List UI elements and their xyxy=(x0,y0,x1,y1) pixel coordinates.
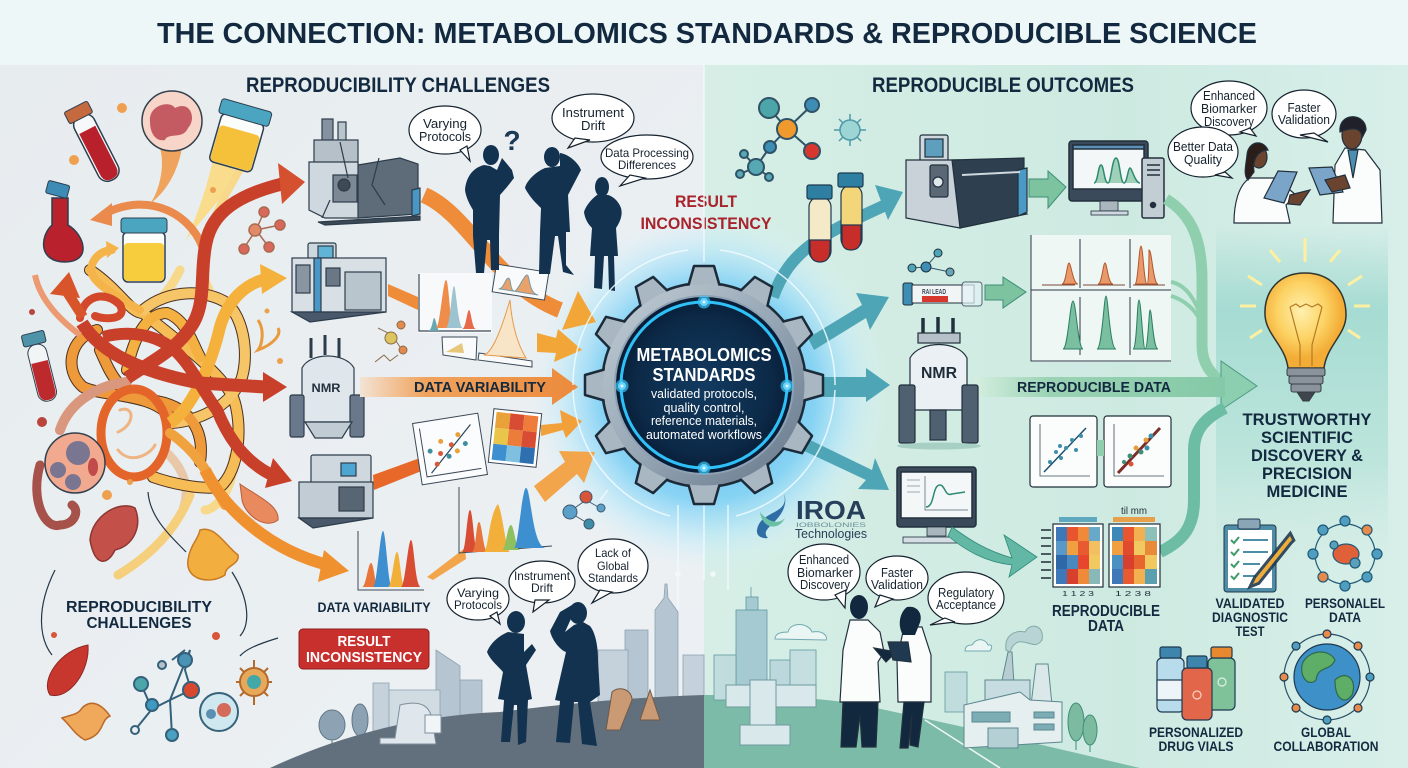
chart: multi peak xyxy=(459,487,552,553)
icon: scanner left xyxy=(380,703,441,744)
orange lower strand xyxy=(170,433,225,505)
label: reproducible data: DATA xyxy=(1088,618,1124,635)
icon: blood flask xyxy=(44,180,83,262)
gear text xyxy=(636,345,772,442)
arrow: tangle to NMR xyxy=(82,323,287,402)
icon: factory xyxy=(964,652,1062,748)
chart: stacked peaks panel xyxy=(1031,235,1171,362)
arrow: chart to gear lower xyxy=(534,451,595,502)
callout bubbles: bottom outcomes: Faster xyxy=(881,566,913,580)
label: reproducibility challenges: REPRODUCIBILITY xyxy=(66,599,212,616)
label: personalel data: PERSONALEL xyxy=(1305,595,1385,611)
silhouettes: researchers bottom xyxy=(487,602,600,746)
label: data variability: DATA VARIABILITY xyxy=(318,599,431,615)
label: personalized drug vials xyxy=(1149,724,1243,754)
chart: heatmap pair: til mm xyxy=(1121,506,1147,517)
arrow: tangle to benchtop instrument xyxy=(170,264,287,423)
icon: small organ xyxy=(240,484,278,523)
icon: question mark: ? xyxy=(503,125,521,156)
arrow: tangle to cracked MS xyxy=(127,163,305,378)
icon: trees right xyxy=(1068,703,1097,752)
icon: small tube xyxy=(21,330,60,404)
icon: blood tube xyxy=(64,101,124,186)
instrument: NMR left xyxy=(290,335,364,438)
callout bubbles: bottom outcomes: Biomarker xyxy=(797,566,853,580)
pink tail xyxy=(60,382,127,430)
icon: lower monitor xyxy=(897,467,976,543)
icon: vial and molecule: RAI LEAD xyxy=(922,289,946,296)
icon: drug vials xyxy=(1157,647,1235,720)
callout: result inconsistency top: INCONSISTENCY xyxy=(640,214,772,233)
callout bubbles: bottom challenges: Standards xyxy=(588,571,638,585)
icon: virus right xyxy=(834,114,866,146)
orange and yellow strand outlines xyxy=(72,270,245,488)
arrow: tangle to analyser xyxy=(103,334,292,488)
icon: red bacterium xyxy=(47,645,88,696)
icon: scanner right xyxy=(726,680,816,745)
gear nodes xyxy=(618,298,791,472)
instrument: NMR right: NMR xyxy=(921,365,957,382)
gear text: automated workflows xyxy=(646,427,762,442)
icon: tissue circle xyxy=(142,91,202,151)
small molecule lower xyxy=(563,491,605,529)
arrow: cracked MS to gear xyxy=(424,195,596,330)
callout bubbles: top outcomes: Enhanced xyxy=(1203,89,1255,103)
arrow: upward red xyxy=(35,272,83,335)
callout bubbles: top outcomes: Quality xyxy=(1184,153,1223,167)
label: personalized drug vials: PERSONALIZED xyxy=(1149,724,1243,740)
arrow: MS to monitor xyxy=(1029,171,1066,208)
red loop xyxy=(80,296,122,318)
big orange ellipse xyxy=(101,389,167,477)
callout bubbles: top challenges: Differences xyxy=(618,158,676,172)
molecule network bottom xyxy=(131,650,199,741)
label: reproducibility challenges: CHALLENGES xyxy=(86,615,192,632)
logo: IROA: IROA xyxy=(796,495,866,525)
chart: scatter pair xyxy=(1030,416,1171,487)
tangled sample pathways xyxy=(37,170,245,575)
icon: orange amoeba xyxy=(62,703,110,740)
arrow: analyser to scatter xyxy=(373,458,424,490)
callout: result inconsistency box: INCONSISTENCY xyxy=(306,650,422,666)
arrow: data variability xyxy=(360,368,578,405)
label: trustworthy scientific discovery: TRUSTWORTHY xyxy=(1242,410,1372,429)
icon: trees left xyxy=(319,704,368,750)
arrow: chart to gear xyxy=(537,329,582,362)
callout bubbles: bottom challenges: Drift xyxy=(531,581,554,595)
chart: heatmap pair xyxy=(1041,506,1160,598)
chart: peaks lower xyxy=(358,531,424,590)
instrument: NMR left: NMR xyxy=(312,381,341,395)
instrument: benchtop analyser xyxy=(292,243,386,322)
label: global collaboration xyxy=(1274,724,1378,754)
gear glow xyxy=(528,212,888,572)
decorative dots xyxy=(29,103,283,640)
bulb filament xyxy=(1290,304,1322,366)
molecule: top right xyxy=(736,98,820,181)
label: trustworthy scientific discovery xyxy=(1242,410,1372,501)
heading: reproducibility challenges: REPRODUCIBILITY CHALLENGES xyxy=(246,74,550,97)
icon: cell cluster xyxy=(45,433,105,493)
callout bubbles: top challenges: Data Processing xyxy=(605,146,689,160)
icon: personal data network xyxy=(1308,516,1382,591)
icon: lightbulb xyxy=(1240,238,1370,401)
icon: small molecule middle xyxy=(375,321,407,362)
icon: globe network xyxy=(1280,630,1374,724)
gear ring xyxy=(621,302,787,468)
arrow: big green merge xyxy=(1166,199,1257,410)
callout bubbles: top challenges: Protocols xyxy=(419,130,471,144)
label: trustworthy scientific discovery: MEDICINE xyxy=(1266,482,1348,501)
label: validated diagnostic test xyxy=(1212,595,1288,639)
callout bubbles: top challenges: Varying xyxy=(423,117,467,131)
icon: urine jar tilted xyxy=(205,98,272,174)
scientists bottom xyxy=(840,595,931,748)
icon: vial and molecule xyxy=(903,249,982,306)
callout bubbles: bottom challenges: Global xyxy=(597,559,629,573)
arrow: gear to NMR xyxy=(820,368,890,402)
label: global collaboration: GLOBAL xyxy=(1301,724,1351,740)
connector: chart to green arrow xyxy=(1171,282,1205,330)
connector: scatter pair xyxy=(1097,440,1104,456)
bulb glass xyxy=(1265,273,1346,368)
callout bubbles: top challenges: Drift xyxy=(581,119,606,133)
callout bubbles: top challenges: Instrument xyxy=(562,106,625,120)
instrument: analyser lower xyxy=(299,455,373,528)
callout: result inconsistency top: RESULT xyxy=(675,192,738,211)
gear: metabolomics standards xyxy=(585,266,823,504)
arrow: heatmap to gear xyxy=(541,410,582,438)
chart: scatter card xyxy=(413,413,487,485)
label: reproducible data: REPRODUCIBLE xyxy=(1052,603,1160,620)
logo: IROA: Technologies xyxy=(795,527,867,541)
bulb rays xyxy=(1240,238,1370,338)
callout bubbles: bottom outcomes: Enhanced xyxy=(799,553,849,567)
callout bubbles: top outcomes: Biomarker xyxy=(1201,102,1257,116)
chart: heatmap pair: 1 1 2 3 xyxy=(1062,591,1094,598)
chart: tilted small card xyxy=(492,264,549,300)
arrow: gear to monitor xyxy=(800,438,889,490)
icon: yellow organ xyxy=(188,529,238,580)
callout bubbles: top challenges xyxy=(409,94,693,186)
callout bubbles: bottom challenges: Instrument xyxy=(514,569,571,583)
callout bubbles: bottom outcomes: Acceptance xyxy=(936,598,996,612)
gear text: STANDARDS xyxy=(652,365,756,385)
arrow: back to flask head xyxy=(90,203,112,226)
callout bubbles: top outcomes: Validation xyxy=(1278,113,1330,127)
scientists top right xyxy=(1234,117,1382,223)
label: validated diagnostic test: DIAGNOSTIC xyxy=(1212,609,1288,625)
arrow: yellow hook head xyxy=(106,241,119,258)
circuit lines xyxy=(573,65,835,610)
arrow: small swoosh xyxy=(427,548,466,580)
icon: clouds xyxy=(775,624,992,651)
callout bubbles: top outcomes: Better Data xyxy=(1173,140,1233,154)
label: trustworthy scientific discovery: DISCOVERY & xyxy=(1251,446,1363,465)
gear core xyxy=(615,296,793,474)
icon: urine jar xyxy=(121,218,167,282)
instrument: cracked mass spectrometer xyxy=(309,119,420,225)
arrow: gear to vial xyxy=(808,293,889,350)
instrument: mass spectrometer right xyxy=(906,135,1027,228)
road line xyxy=(925,720,1000,768)
gear text: quality control, xyxy=(664,400,744,415)
chart: heatmap pair: 1 2 3 8 xyxy=(1115,591,1151,598)
arrow: tangle to chart xyxy=(205,470,349,582)
panel: outcomes background xyxy=(704,65,1408,768)
callout bubbles: bottom outcomes: Discovery xyxy=(800,578,851,592)
arrow: data variability: DATA VARIABILITY xyxy=(414,380,546,396)
label: reproducibility challenges xyxy=(66,599,212,632)
gear body xyxy=(604,284,804,486)
label: personalel data: DATA xyxy=(1329,609,1361,625)
gear text: METABOLOMICS xyxy=(636,345,772,365)
chart: heatmap card xyxy=(488,409,542,467)
callout bubbles: bottom challenges: Protocols xyxy=(454,598,502,612)
icon: virus xyxy=(236,660,272,705)
logo: IROA xyxy=(757,494,867,541)
panel: outcomes highlight column xyxy=(1216,225,1388,565)
ground: left road xyxy=(270,695,704,768)
title: THE CONNECTION: METABOLOMICS STANDARDS & REPRODUCIBLE SCIENCE xyxy=(157,18,1257,50)
callout: result inconsistency box xyxy=(299,629,429,669)
arrow: reproducible data xyxy=(975,377,1225,397)
icon: round cell xyxy=(200,693,238,731)
silhouettes: researchers top xyxy=(465,145,622,291)
icon: monitor top right xyxy=(1069,141,1164,218)
arrow: reproducible data: REPRODUCIBLE DATA xyxy=(1017,380,1172,396)
icon: sample tubes xyxy=(807,173,863,262)
icon: clipboard xyxy=(1224,519,1292,592)
callout bubbles: top outcomes: Discovery xyxy=(1204,115,1255,129)
callout bubbles: bottom challenges: Lack of xyxy=(595,546,632,560)
callout bubbles: top outcomes xyxy=(1168,81,1336,178)
arrow: gear to tubes and MS xyxy=(773,185,903,297)
header band xyxy=(0,0,1408,65)
icon: lab figures background xyxy=(606,689,660,730)
label: reproducible data xyxy=(1052,603,1160,635)
gear text: reference materials, xyxy=(651,413,757,428)
logo: IROA: IOBBOLONIES xyxy=(796,523,866,529)
label: validated diagnostic test: TEST xyxy=(1236,623,1265,639)
callout bubbles: bottom outcomes xyxy=(788,544,1004,625)
city skyline left xyxy=(373,584,704,740)
cycle arcs xyxy=(41,492,278,656)
small molecule: top left xyxy=(239,207,285,254)
swirl inside ellipse xyxy=(118,409,155,458)
callout bubbles: bottom outcomes: Regulatory xyxy=(938,586,995,600)
label: global collaboration: COLLABORATION xyxy=(1274,738,1378,754)
yellow hook xyxy=(91,250,140,310)
label: personalel data xyxy=(1305,595,1385,625)
label: validated diagnostic test: VALIDATED xyxy=(1216,595,1284,611)
arrow: monitor to heatmap xyxy=(948,527,1037,577)
pale ribbon strands xyxy=(37,170,240,575)
city skyline right xyxy=(714,587,967,712)
icon: smoke xyxy=(1006,626,1042,652)
callout: result inconsistency box: RESULT xyxy=(338,634,391,650)
panel: challenges background xyxy=(0,65,704,768)
orange and yellow strands xyxy=(72,270,245,488)
label: personalized drug vials: DRUG VIALS xyxy=(1158,738,1234,754)
callout bubbles: bottom outcomes: Validation xyxy=(871,578,923,592)
callout bubbles: top outcomes: Faster xyxy=(1288,101,1320,115)
instrument: NMR right xyxy=(897,317,981,450)
heading: reproducible outcomes: REPRODUCIBLE OUTCOMES xyxy=(872,74,1134,97)
gear text: validated protocols, xyxy=(651,386,757,401)
callout bubbles: bottom challenges: Varying xyxy=(457,586,499,600)
bulb screw base xyxy=(1287,368,1325,401)
arrow: vial to chart xyxy=(985,277,1026,308)
arrow: heatmap to green merge xyxy=(1160,408,1225,552)
sample tails xyxy=(150,148,240,240)
icon: liver organ xyxy=(90,506,138,561)
callout: result inconsistency top xyxy=(640,192,772,233)
callout bubbles: bottom challenges xyxy=(447,539,648,624)
right ground xyxy=(704,695,1140,768)
gear teeth xyxy=(585,266,823,504)
chart: tilted sheets xyxy=(442,300,532,367)
label: trustworthy scientific discovery: PRECISION xyxy=(1262,464,1352,483)
chart: peaks top xyxy=(418,273,492,333)
label: trustworthy scientific discovery: SCIENTIFIC xyxy=(1261,428,1353,447)
arrow: analyser to chart xyxy=(388,284,418,310)
